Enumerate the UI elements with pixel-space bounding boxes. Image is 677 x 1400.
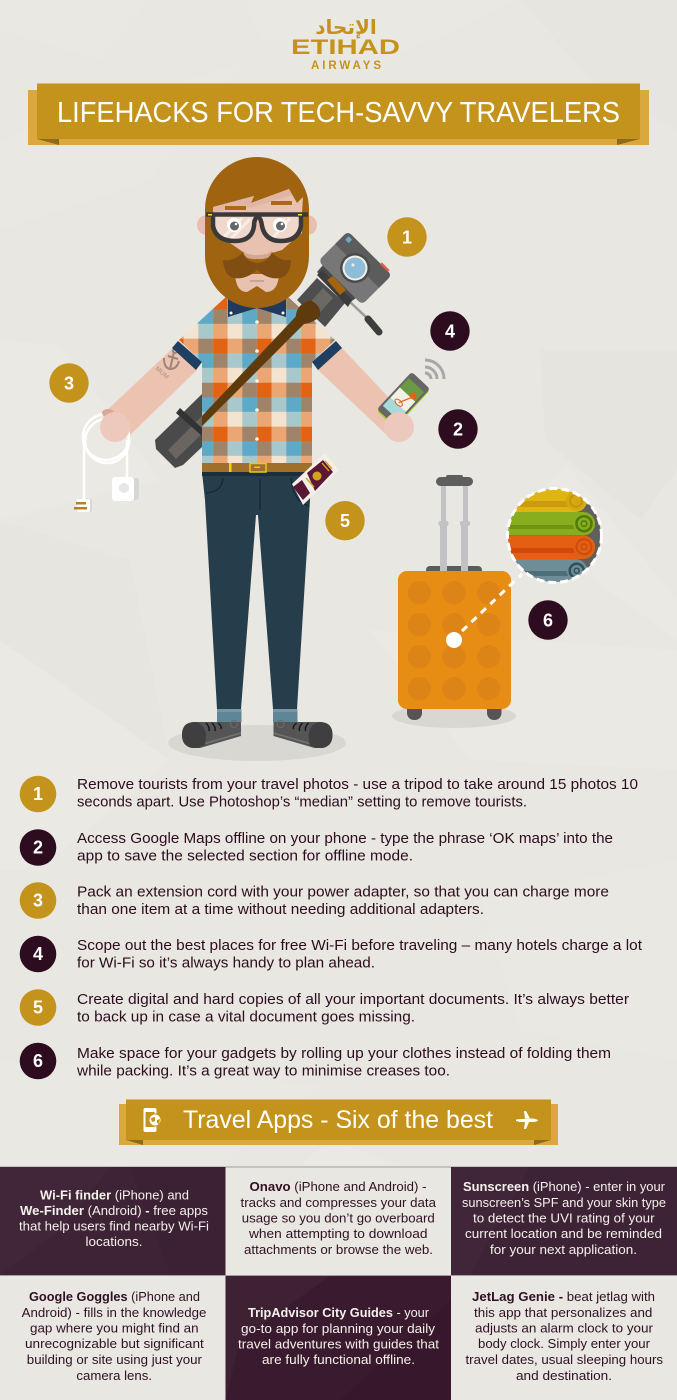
number marker 1: 1	[402, 228, 412, 248]
tip 4: Scope out the best places for free Wi-Fi before traveling – many hotels charge a lot	[77, 938, 642, 954]
tip 5: to back up in case a vital document goes missing.	[77, 1010, 415, 1026]
app card: TripAdvisor City Guides: TripAdvisor City Guides - your	[248, 1305, 430, 1320]
tip 3: Pack an extension cord with your power adapter, so that you can charge more	[77, 884, 609, 900]
number marker 3	[49, 363, 89, 403]
app card: Onavo: Onavo (iPhone and Android) -	[250, 1179, 426, 1194]
trousers	[202, 472, 312, 709]
number marker 2	[438, 409, 478, 449]
app card: TripAdvisor City Guides: go-to app for planning your daily	[241, 1321, 436, 1336]
belt	[202, 463, 312, 472]
app card: JetLag Genie: travel dates, usual sleeping hours	[466, 1352, 663, 1367]
tip 2	[20, 829, 613, 866]
number marker 2: 2	[453, 420, 463, 440]
number marker 4	[430, 311, 470, 351]
tip 5: Create digital and hard copies of all your important documents. It’s always better	[77, 992, 629, 1008]
app card: Wi-Fi finder: that help users find nearby Wi-Fi	[19, 1218, 209, 1234]
logo: Etihad Airways	[291, 15, 400, 72]
tip 1: seconds apart. Use Photoshop’s “median” setting to remove tourists.	[77, 794, 527, 810]
travel apps banner	[119, 1099, 558, 1145]
app card: Google Goggles: unrecognizable but significant	[25, 1336, 204, 1351]
title banner	[28, 83, 649, 145]
tip 2: 2	[33, 838, 43, 858]
app card: Sunscreen: current location and be reminded	[465, 1226, 662, 1241]
left arm with tattoo: MUM	[154, 365, 170, 381]
app card: TripAdvisor City Guides: travel adventures with guides that	[238, 1336, 439, 1352]
app card: Wi-Fi finder: We-Finder (Android) - free apps	[20, 1203, 208, 1218]
heading: Travel Apps - Six of the best	[183, 1106, 493, 1134]
app card: Sunscreen: for your next application.	[490, 1242, 637, 1257]
app card: Onavo	[240, 1179, 437, 1257]
number marker 5: 5	[340, 511, 350, 531]
number marker 5	[325, 501, 365, 540]
logo: Etihad Airways: الإتحاد	[315, 15, 377, 39]
tip 4: 4	[33, 944, 43, 964]
tip 5: 5	[33, 998, 43, 1018]
app card: Onavo: tracks and compresses your data	[240, 1195, 437, 1210]
app card: Onavo: attachments or browse the web.	[244, 1242, 433, 1257]
icon: plane	[516, 1111, 538, 1129]
glasses	[206, 214, 308, 241]
app card: Google Goggles: Android) - fills in the knowledge	[22, 1305, 206, 1320]
tip 4: for Wi-Fi so it’s always handy to plan ahead.	[77, 956, 375, 972]
tip 6	[20, 1043, 611, 1080]
app card: Sunscreen: to detect the UVI rating of your	[473, 1210, 655, 1226]
head	[197, 157, 317, 308]
logo: Etihad Airways: ETIHAD	[291, 36, 400, 59]
nose	[243, 250, 272, 259]
right arm	[318, 348, 408, 438]
tip 3: 3	[33, 890, 43, 910]
app card: Sunscreen	[451, 1167, 677, 1275]
phone with map	[376, 360, 444, 428]
app card: JetLag Genie: and destination.	[516, 1368, 612, 1383]
selfie stick with camera	[296, 230, 393, 332]
app card: Sunscreen: sunscreen’s SPF and your skin type	[462, 1195, 666, 1210]
magnified rolled clothes	[506, 487, 603, 584]
number marker 6	[528, 600, 568, 640]
shoes	[182, 720, 332, 748]
number marker 3: 3	[64, 374, 74, 394]
number marker 4: 4	[445, 322, 455, 342]
app card: Onavo: when attempting to download	[248, 1226, 428, 1241]
passport in pocket	[292, 453, 339, 505]
eyebrows	[225, 201, 292, 210]
tip 6: while packing. It’s a great way to minimise creases too.	[76, 1064, 450, 1080]
tip 3	[20, 882, 609, 919]
app card: TripAdvisor City Guides	[226, 1276, 451, 1400]
app card: Wi-Fi finder: Wi-Fi finder (iPhone) and	[40, 1188, 189, 1202]
icon: phone with globe	[144, 1108, 162, 1132]
app card: JetLag Genie	[466, 1289, 663, 1383]
tip 5	[20, 989, 629, 1026]
camera bag	[155, 394, 202, 468]
tip 6: 6	[33, 1051, 43, 1071]
number marker 6: 6	[543, 610, 553, 630]
app card: Sunscreen: Sunscreen (iPhone) - enter in your	[463, 1179, 666, 1194]
illustration: hipster traveler	[74, 157, 444, 761]
moustache	[223, 252, 291, 278]
power cord and adapter	[74, 414, 139, 512]
bag strap	[202, 312, 308, 427]
app card: Google Goggles: gap where you might find an	[30, 1320, 199, 1336]
bow tie	[228, 296, 286, 317]
camera	[318, 230, 393, 305]
tip 1: Remove tourists from your travel photos - use a tripod to take around 15 photos 10	[77, 777, 638, 793]
left arm with tattoo	[102, 348, 197, 435]
number marker 1	[387, 217, 427, 257]
logo: Etihad Airways: AIRWAYS	[311, 60, 381, 72]
app card: JetLag Genie: JetLag Genie - beat jetlag with	[472, 1289, 655, 1304]
tip 2: Access Google Maps offline on your phone - type the phrase ‘OK maps’ into the	[77, 831, 613, 847]
tip 6: Make space for your gadgets by rolling up your clothes instead of folding them	[77, 1046, 611, 1062]
app card: Google Goggles	[22, 1289, 206, 1383]
app card: TripAdvisor City Guides: are fully functional offline.	[262, 1352, 415, 1367]
app card: JetLag Genie: body clock. Simply enter your	[478, 1336, 651, 1351]
app card: Wi-Fi finder	[0, 1167, 226, 1275]
plaid shirt	[172, 295, 342, 463]
strap knob	[296, 300, 320, 324]
app card: Wi-Fi finder: locations.	[86, 1234, 142, 1249]
title: LIFEHACKS FOR TECH-SAVVY TRAVELERS	[57, 97, 620, 129]
tip 1: 1	[33, 784, 43, 804]
face	[213, 189, 303, 258]
trouser cuffs	[217, 709, 298, 722]
tip 1	[20, 776, 638, 812]
app card: Google Goggles: camera lens.	[76, 1368, 152, 1383]
tip 2: app to save the selected section for offline mode.	[77, 848, 413, 864]
suitcase	[392, 475, 522, 728]
left hand	[100, 409, 130, 442]
app card: Onavo: usage so you don’t go overboard	[242, 1210, 435, 1226]
mouth	[235, 274, 279, 292]
right hand	[384, 412, 414, 442]
app card: Google Goggles: Google Goggles (iPhone and	[29, 1289, 200, 1304]
tip 4	[20, 936, 642, 972]
app card: Google Goggles: building or site using just your	[27, 1352, 203, 1367]
tip 3: than one item at a time without needing additional adapters.	[77, 902, 484, 918]
app card: JetLag Genie: adjusts an alarm clock to your	[475, 1320, 654, 1336]
app card: JetLag Genie: this app that personalizes and	[474, 1305, 652, 1320]
app grid	[0, 1166, 677, 1400]
